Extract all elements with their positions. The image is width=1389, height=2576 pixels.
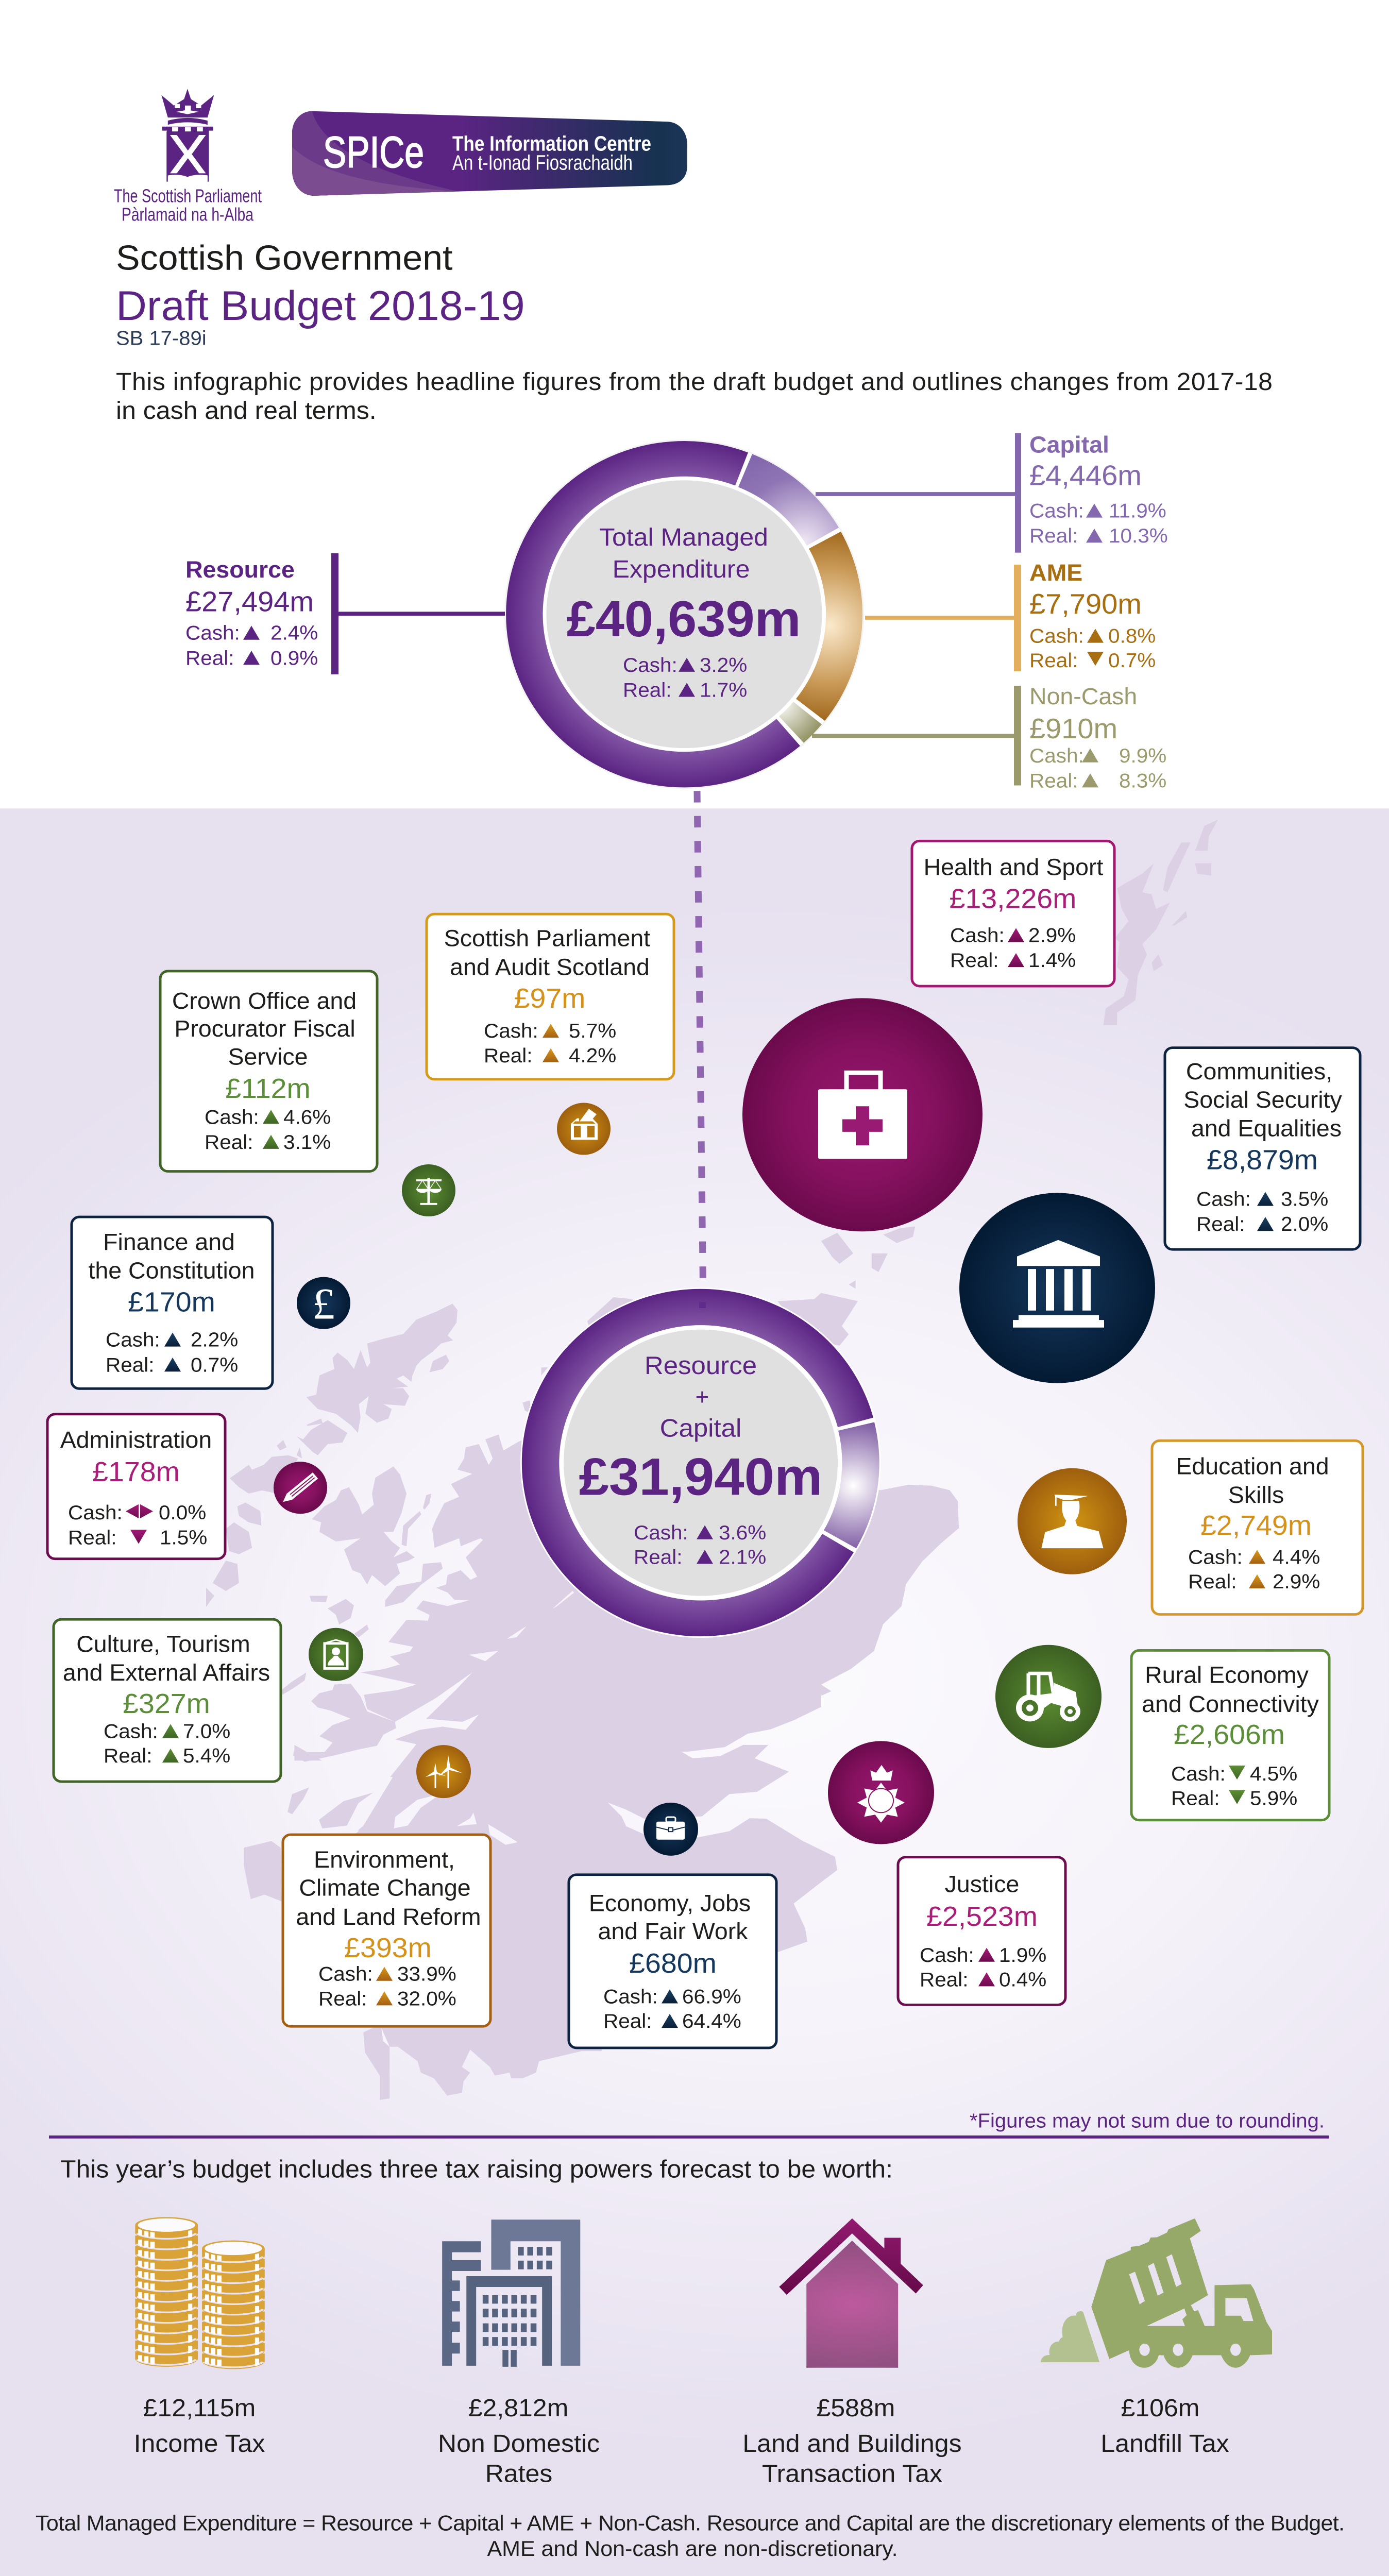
box: Rural Economy and Connectivity: and Connectivity: [1142, 1691, 1319, 1717]
box: Scottish Parliament and Audit Scotland: Scottish Parliament: [444, 925, 650, 951]
label: non domestic rates: £2,812m: [468, 2394, 568, 2422]
box: Scottish Parliament and Audit Scotland: and Audit Scotland: [450, 954, 650, 980]
callout: resource: Cash:: [185, 622, 240, 645]
intro text: [116, 368, 1273, 425]
callout: resource: 2.4%: [270, 622, 318, 645]
callout: non-cash: 9.9%: [1119, 744, 1166, 767]
box: Health and Sport: Cash:: [950, 924, 1005, 946]
icon: coin stacks: [135, 2217, 265, 2369]
box: Economy, Jobs and Fair Work: [569, 1875, 776, 2048]
title block: Draft Budget 2018-19: [116, 283, 525, 329]
box: Culture, Tourism and External Affairs: Cash:: [104, 1720, 158, 1742]
box: Culture, Tourism and External Affairs: Culture, Tourism: [76, 1631, 250, 1657]
donut chart: total managed expenditure: 3.2%: [700, 654, 747, 676]
intro text: in cash and real terms.: [116, 397, 377, 425]
callout: capital: Real:: [1029, 525, 1078, 547]
callout: non-cash: 8.3%: [1119, 770, 1166, 792]
icon: wind turbines: [416, 1745, 471, 1798]
box: Communities, Social Security and Equalities: 2.0%: [1281, 1213, 1328, 1235]
box: Finance and the Constitution: 0.7%: [191, 1354, 238, 1376]
donut chart: resource plus capital: 3.6%: [719, 1521, 766, 1544]
box: Environment, Climate Change and Land Reform: Cash:: [318, 1963, 373, 1986]
title block: Scottish Government: [116, 239, 452, 277]
logo: SPICe banner: [292, 111, 687, 196]
callout: non-cash: Real:: [1029, 770, 1078, 792]
box: Culture, Tourism and External Affairs: Real:: [104, 1745, 153, 1767]
icon: graduate: [1018, 1468, 1127, 1574]
box: Culture, Tourism and External Affairs: 5.4%: [183, 1745, 230, 1767]
donut chart: total managed expenditure: £40,639m: [567, 591, 801, 648]
box: Health and Sport: [912, 841, 1114, 986]
label: landfill tax: £106m: [1121, 2394, 1199, 2422]
icon: portrait frame: [309, 1628, 363, 1681]
box: Communities, Social Security and Equalities: and Equalities: [1191, 1115, 1342, 1141]
title block: [116, 239, 525, 349]
box: Communities, Social Security and Equalities: [1165, 1048, 1360, 1249]
box: Scottish Parliament and Audit Scotland: 5.7%: [569, 1020, 616, 1042]
callout: resource: £27,494m: [185, 586, 314, 617]
label: income tax: [134, 2394, 265, 2458]
donut chart: total managed expenditure: Real:: [623, 679, 672, 701]
callout: AME: 0.8%: [1108, 625, 1156, 647]
intro text: This infographic provides headline figures from the draft budget and outlines changes from 2017-18: [116, 368, 1273, 396]
label: non domestic rates: Rates: [485, 2460, 552, 2487]
box: Administration: Administration: [60, 1427, 212, 1453]
label: land and buildings transaction tax: Land and Buildings: [742, 2430, 962, 2458]
page background panel: [0, 808, 1389, 2576]
divider rule: [49, 2136, 1329, 2139]
box: Finance and the Constitution: Finance and: [103, 1229, 235, 1255]
icon: columned building: [959, 1193, 1155, 1383]
callout: capital: Capital: [1029, 432, 1109, 457]
box: Education and Skills: Skills: [1228, 1482, 1284, 1508]
box: Education and Skills: 4.4%: [1273, 1546, 1320, 1568]
box: Finance and the Constitution: the Constitution: [88, 1258, 255, 1283]
donut chart: resource plus capital: 2.1%: [719, 1546, 766, 1568]
box: Crown Office and Procurator Fiscal Service: [160, 971, 377, 1172]
donut chart: resource plus capital: Cash:: [634, 1521, 688, 1544]
icon: ballot box: [557, 1103, 611, 1155]
callout: AME: £7,790m: [1029, 588, 1142, 620]
box: Rural Economy and Connectivity: Cash:: [1171, 1763, 1226, 1785]
box: Education and Skills: Education and: [1176, 1453, 1329, 1479]
box: Justice: Real:: [920, 1969, 969, 1991]
label: land and buildings transaction tax: Transaction Tax: [762, 2460, 942, 2487]
box: Crown Office and Procurator Fiscal Service: Cash:: [205, 1106, 259, 1128]
box: Justice: Cash:: [920, 1944, 974, 1967]
box: Economy, Jobs and Fair Work: Real:: [603, 2010, 652, 2032]
box: Communities, Social Security and Equalities: Cash:: [1196, 1188, 1251, 1211]
box: Communities, Social Security and Equalities: Real:: [1196, 1213, 1245, 1235]
box: Justice: [898, 1857, 1065, 2005]
icon: house: [779, 2218, 923, 2368]
icon: briefcase: [643, 1803, 698, 1856]
label: non domestic rates: [438, 2394, 600, 2487]
callout: resource: Resource: [185, 557, 295, 583]
callout: resource: 0.9%: [270, 647, 318, 669]
label: income tax: Income Tax: [134, 2430, 265, 2458]
box: Administration: 0.0%: [159, 1501, 206, 1524]
label: income tax: £12,115m: [143, 2394, 256, 2422]
callout: non-cash: £910m: [1029, 713, 1117, 744]
icon: police badge: [828, 1741, 934, 1844]
logo: SPICe banner: The Information Centre: [452, 132, 651, 155]
footnote: rounding: *Figures may not sum due to rounding.: [970, 2110, 1325, 2132]
box: Finance and the Constitution: 2.2%: [191, 1329, 238, 1351]
box: Justice: Justice: [945, 1871, 1019, 1897]
box: Environment, Climate Change and Land Reform: Climate Change: [299, 1875, 471, 1901]
box: Health and Sport: Health and Sport: [924, 854, 1104, 880]
map of Scotland: [206, 820, 1218, 2100]
callout: AME: [865, 560, 1156, 672]
box: Scottish Parliament and Audit Scotland: [427, 914, 674, 1079]
box: Justice: 0.4%: [999, 1969, 1046, 1991]
label: landfill tax: [1100, 2394, 1229, 2458]
donut chart: total managed expenditure: Total Managed: [599, 523, 768, 551]
box: Crown Office and Procurator Fiscal Service: Service: [228, 1044, 308, 1070]
logo: SPICe banner: An t-Ionad Fiosrachaidh: [452, 151, 633, 174]
box: Communities, Social Security and Equalities: Social Security: [1183, 1087, 1342, 1113]
box: Rural Economy and Connectivity: 5.9%: [1250, 1787, 1297, 1810]
box: Economy, Jobs and Fair Work: £680m: [629, 1947, 717, 1979]
callout: capital: Cash:: [1029, 500, 1084, 522]
donut chart: total managed expenditure: Expenditure: [613, 555, 750, 583]
box: Rural Economy and Connectivity: [1131, 1650, 1329, 1820]
box: Administration: 1.5%: [160, 1527, 207, 1549]
callout: capital: 10.3%: [1109, 525, 1168, 547]
donut chart: total managed expenditure: Cash:: [623, 654, 677, 676]
donut chart: resource plus capital: Capital: [660, 1413, 741, 1442]
box: Communities, Social Security and Equalities: 3.5%: [1281, 1188, 1328, 1211]
box: Environment, Climate Change and Land Reform: and Land Reform: [296, 1904, 481, 1930]
callout: AME: Real:: [1029, 650, 1078, 672]
callout: resource: [185, 553, 505, 674]
box: Crown Office and Procurator Fiscal Service: Procurator Fiscal: [174, 1016, 355, 1042]
box: Scottish Parliament and Audit Scotland: Real:: [484, 1044, 533, 1067]
label: non domestic rates: Non Domestic: [438, 2430, 600, 2458]
box: Crown Office and Procurator Fiscal Service: Real:: [205, 1131, 253, 1154]
box: Education and Skills: 2.9%: [1273, 1570, 1320, 1593]
box: Scottish Parliament and Audit Scotland: £97m: [514, 982, 585, 1014]
callout: capital: 11.9%: [1109, 500, 1166, 522]
logo: Scottish Parliament crest: Pàrlamaid na h-Alba: [122, 204, 254, 225]
box: Culture, Tourism and External Affairs: [54, 1619, 281, 1782]
donut chart: resource plus capital: [520, 1287, 881, 1638]
donut chart: resource plus capital: Resource: [645, 1351, 757, 1380]
callout: non-cash: Cash:: [1029, 744, 1084, 767]
footer note: AME and Non-cash are non-discretionary.: [487, 2537, 898, 2561]
box: Culture, Tourism and External Affairs: £327m: [123, 1688, 210, 1719]
box: Education and Skills: [1152, 1440, 1363, 1615]
callout: resource: Real:: [185, 647, 234, 669]
footer note: [36, 2511, 1345, 2561]
callout: AME: 0.7%: [1108, 650, 1156, 672]
box: Economy, Jobs and Fair Work: Economy, Jobs: [589, 1890, 751, 1917]
icon: tractor: [995, 1645, 1102, 1748]
box: Administration: [47, 1414, 225, 1559]
box: Scottish Parliament and Audit Scotland: 4.2%: [569, 1044, 616, 1067]
donut chart: total managed expenditure: [504, 439, 864, 789]
box: Environment, Climate Change and Land Reform: [283, 1835, 490, 2026]
icon: office buildings: [442, 2219, 580, 2367]
box: Culture, Tourism and External Affairs: and External Affairs: [63, 1659, 270, 1686]
label: land and buildings transaction tax: £588m: [817, 2394, 895, 2422]
box: Crown Office and Procurator Fiscal Service: 4.6%: [283, 1106, 331, 1128]
callout: capital: [816, 432, 1168, 553]
icon: pound sign: £: [312, 1279, 335, 1328]
box: Communities, Social Security and Equalities: Communities,: [1186, 1058, 1332, 1084]
box: Health and Sport: Real:: [950, 950, 999, 972]
box: Justice: 1.9%: [999, 1944, 1046, 1967]
box: Communities, Social Security and Equalities: £8,879m: [1207, 1144, 1318, 1176]
box: Environment, Climate Change and Land Reform: 33.9%: [397, 1963, 456, 1986]
box: Scottish Parliament and Audit Scotland: Cash:: [484, 1020, 538, 1042]
box: Education and Skills: £2,749m: [1200, 1510, 1312, 1541]
box: Culture, Tourism and External Affairs: 7.0%: [183, 1720, 230, 1742]
box: Education and Skills: Cash:: [1188, 1546, 1243, 1568]
box: Health and Sport: 2.9%: [1028, 924, 1076, 946]
box: Crown Office and Procurator Fiscal Service: Crown Office and: [172, 988, 357, 1014]
heading: tax raising powers: This year’s budget includes three tax raising powers forecast to be worth:: [60, 2155, 893, 2183]
icon: pound sign: [297, 1277, 350, 1329]
icon: pencil: [274, 1462, 327, 1514]
box: Rural Economy and Connectivity: Rural Economy: [1145, 1662, 1309, 1688]
box: Finance and the Constitution: [72, 1217, 273, 1388]
callout: non-cash: Non-Cash: [1029, 684, 1137, 709]
box: Rural Economy and Connectivity: 4.5%: [1250, 1763, 1297, 1785]
box: Health and Sport: £13,226m: [950, 883, 1076, 914]
box: Economy, Jobs and Fair Work: 66.9%: [682, 1986, 741, 2008]
box: Rural Economy and Connectivity: Real:: [1171, 1787, 1220, 1810]
donut chart: total managed expenditure: 1.7%: [700, 679, 747, 701]
box: Crown Office and Procurator Fiscal Service: £112m: [225, 1073, 311, 1104]
box: Administration: Cash:: [68, 1501, 123, 1524]
footer note: Total Managed Expenditure = Resource + Capital + AME + Non-Cash. Resource and Capital are the discretionary elements of the Budget.: [36, 2511, 1345, 2535]
callout: AME: Cash:: [1029, 625, 1084, 647]
box: Crown Office and Procurator Fiscal Service: 3.1%: [283, 1131, 331, 1154]
title block: SB 17-89i: [116, 327, 207, 349]
icon: tipper truck: [1041, 2218, 1272, 2368]
callout: non-cash: [812, 684, 1166, 792]
icon: medical bag: [742, 998, 983, 1231]
box: Environment, Climate Change and Land Reform: 32.0%: [397, 1988, 456, 2010]
box: Economy, Jobs and Fair Work: 64.4%: [682, 2010, 741, 2032]
box: Rural Economy and Connectivity: £2,606m: [1174, 1719, 1285, 1750]
label: landfill tax: Landfill Tax: [1100, 2430, 1229, 2458]
callout: capital: £4,446m: [1029, 460, 1142, 491]
box: Justice: £2,523m: [926, 1901, 1038, 1932]
box: Economy, Jobs and Fair Work: and Fair Work: [598, 1919, 748, 1944]
box: Administration: £178m: [92, 1456, 180, 1487]
logo: Scottish Parliament crest: [114, 89, 262, 225]
logo: Scottish Parliament crest: The Scottish Parliament: [114, 185, 262, 206]
box: Finance and the Constitution: £170m: [128, 1286, 215, 1317]
box: Health and Sport: 1.4%: [1028, 950, 1076, 972]
callout: AME: AME: [1029, 560, 1082, 586]
donut chart: resource plus capital: +: [696, 1384, 709, 1410]
box: Education and Skills: Real:: [1188, 1570, 1237, 1593]
donut chart: resource plus capital: Real:: [634, 1546, 683, 1568]
box: Economy, Jobs and Fair Work: Cash:: [603, 1986, 658, 2008]
logo: SPICe banner: SPICe: [323, 128, 424, 177]
icon: scales of justice: [402, 1164, 455, 1216]
box: Environment, Climate Change and Land Reform: £393m: [344, 1932, 432, 1963]
box: Administration: Real:: [68, 1527, 117, 1549]
dashed connector: [697, 791, 703, 1307]
donut chart: resource plus capital: £31,940m: [579, 1447, 822, 1506]
box: Environment, Climate Change and Land Reform: Real:: [318, 1988, 367, 2010]
box: Finance and the Constitution: Cash:: [106, 1329, 160, 1351]
box: Finance and the Constitution: Real:: [106, 1354, 155, 1376]
label: land and buildings transaction tax: [742, 2394, 962, 2487]
box: Environment, Climate Change and Land Reform: Environment,: [314, 1847, 455, 1873]
